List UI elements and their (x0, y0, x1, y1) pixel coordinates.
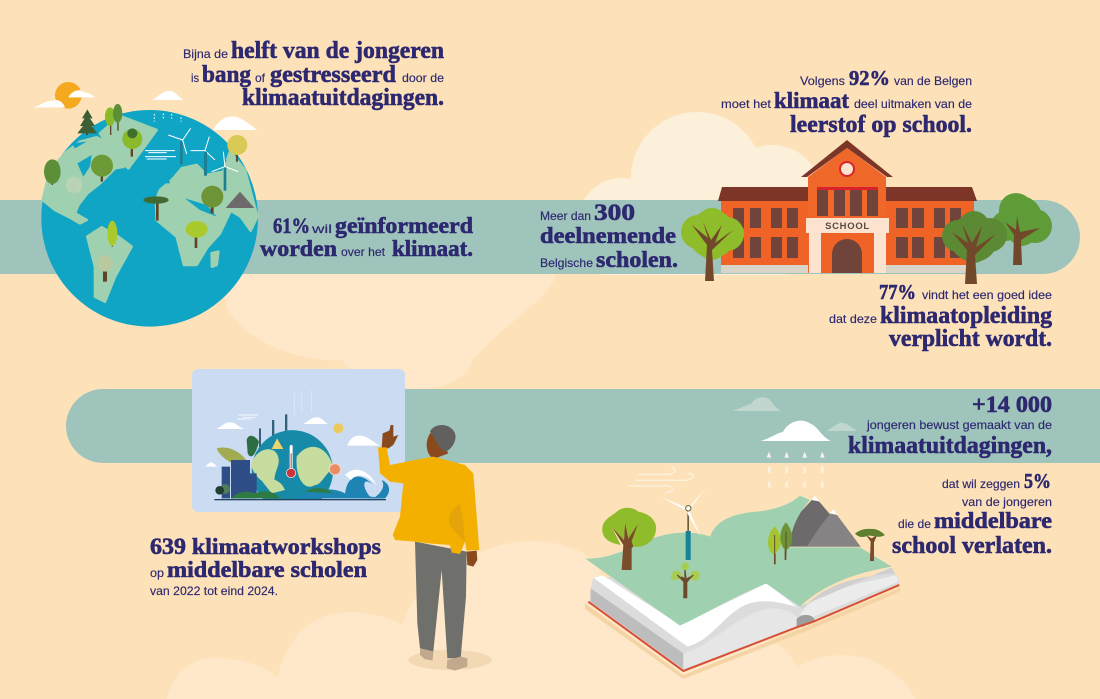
tree right back (991, 193, 1052, 265)
tree left of school (681, 208, 744, 281)
mountains (790, 497, 860, 547)
stat: 61%: geïnformeerd (335, 213, 473, 238)
acacia tree (855, 529, 885, 561)
book shadow (585, 588, 901, 679)
stat: 300 schools: 300 (594, 200, 635, 225)
heading: half of young people: of (255, 71, 266, 85)
heading: half of young people: door de (402, 71, 444, 85)
stat: 77%: verplicht wordt. (889, 326, 1052, 352)
open book landscape (585, 397, 901, 679)
stat: 61%: over het (341, 245, 386, 259)
large tree (602, 508, 656, 570)
lakes (72, 142, 227, 217)
stat: 92%: deel uitmaken van de (854, 97, 972, 111)
stat: 5%: die de (898, 517, 931, 531)
stat: 77%: dat deze (829, 312, 877, 326)
presentation screen (192, 369, 405, 512)
wind turbines (145, 113, 238, 172)
heading: half of young people: gestresseerd (270, 62, 397, 88)
climate illustration on screen (205, 390, 389, 500)
stat: 300 schools: deelnemende (540, 223, 676, 248)
small tree (671, 563, 700, 598)
heading: half of young people: is (191, 71, 199, 85)
band clouds (732, 397, 857, 431)
stat: 92% (721, 66, 972, 138)
stat: 5%: school verlaten. (892, 533, 1052, 559)
stat: 92%: leerstof op school. (790, 112, 972, 138)
stat: 300 schools: scholen. (596, 247, 678, 272)
stat: 92%: moet het (721, 97, 772, 111)
wind lines (628, 468, 693, 492)
stat: 300 schools: Belgische (540, 256, 593, 270)
stat: 14 000 young people: +14 000 (972, 392, 1052, 417)
white sheet (593, 576, 797, 647)
heading: half of young people: Bijna de (183, 47, 228, 61)
heading: half of young people: klimaatuitdagingen. (242, 85, 444, 111)
school building: SCHOOL (825, 221, 870, 232)
stat: 92%: Volgens (800, 74, 845, 88)
person pointing at screen (378, 425, 492, 671)
stat: 92%: klimaat (774, 88, 849, 113)
wind turbine (662, 487, 707, 560)
stat: 77%: 77% (879, 280, 916, 304)
stat: 61%: 61% (273, 213, 310, 238)
continents (43, 116, 257, 302)
stat: 77%: vindt het een goed idee (922, 288, 1052, 302)
stat: 14 000 young people (848, 392, 1052, 459)
stat: 300 schools: Meer dan (540, 209, 591, 223)
stat: 61%: wil (311, 222, 332, 236)
bottom band (66, 389, 1100, 463)
page block (590, 568, 899, 670)
school building (718, 140, 977, 273)
stat: workshops: op (150, 566, 164, 580)
background clouds (167, 112, 915, 699)
stat: workshops (150, 534, 381, 598)
left page (585, 533, 767, 626)
stat: workshops: van 2022 tot eind 2024. (150, 584, 278, 598)
stat: 5%: middelbare (934, 508, 1052, 533)
stat: 92%: 92% (849, 66, 890, 90)
stat: 77%: klimaatopleiding (880, 303, 1052, 329)
stat: 77% (829, 280, 1052, 352)
red cover (588, 585, 899, 671)
stat: 61% (260, 213, 473, 261)
stat: 61%: klimaat. (392, 236, 473, 261)
stat: 92%: van de Belgen (894, 74, 972, 88)
sun and clouds (33, 82, 257, 130)
tree right front (942, 211, 1007, 284)
stat: 300 schools (540, 200, 678, 272)
heading: half of young people: bang (202, 62, 251, 88)
rain cloud (761, 421, 831, 488)
stat: 14 000 young people: klimaatuitdagingen, (848, 433, 1052, 459)
globe illustration (33, 82, 258, 327)
stat: 5%: dat wil zeggen (942, 477, 1020, 491)
stat: 14 000 young people: jongeren bewust gemaakt van de (866, 418, 1052, 432)
stat: workshops: middelbare scholen (167, 557, 367, 582)
stat: 5% (892, 469, 1052, 559)
top band (0, 200, 1080, 274)
trousers (415, 542, 467, 658)
heading: half of young people: helft van de jongeren (231, 38, 444, 64)
stat: 61%: worden (260, 236, 337, 261)
trees on globe (44, 104, 254, 282)
stat: workshops: 639 klimaatworkshops (150, 534, 381, 559)
hand (382, 425, 398, 448)
two slim trees (768, 522, 792, 564)
stat: 5%: 5% (1024, 469, 1051, 493)
heading: half of young people (183, 38, 444, 111)
head (427, 430, 448, 458)
stat: 5%: van de jongeren (962, 495, 1052, 509)
right page (710, 496, 892, 607)
jacket (378, 447, 479, 554)
page edge curves (591, 588, 798, 669)
